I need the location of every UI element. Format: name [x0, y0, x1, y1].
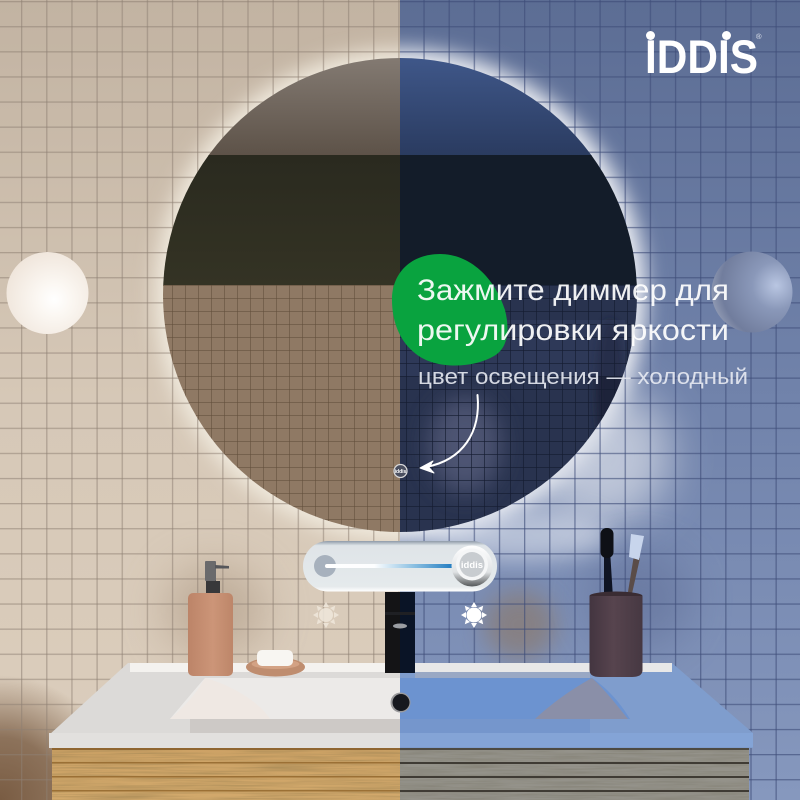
sun icon: low brightness	[313, 602, 339, 628]
warm mirror glow	[148, 40, 400, 541]
soap dish with soap	[246, 650, 305, 676]
slider knob: iddis	[461, 560, 483, 571]
mirror warm half	[163, 58, 400, 532]
faucet	[385, 592, 415, 673]
background: warm tiled wall	[0, 0, 400, 800]
left glowing lamp	[6, 252, 88, 334]
touch dimmer icon on mirror: iddis	[395, 469, 407, 475]
right cool lamp	[712, 252, 792, 332]
cold mirror glow	[400, 34, 660, 541]
subheading: light colour: цвет освещения — холодный	[418, 364, 748, 389]
touch dimmer icon on mirror	[394, 464, 407, 478]
slider track	[325, 564, 455, 568]
soap dispenser	[188, 561, 233, 676]
wood cabinet warm half	[52, 748, 400, 800]
green highlight blob	[392, 254, 507, 366]
sink countertop cold half	[400, 663, 753, 748]
toothbrush: light	[627, 534, 644, 598]
IDDIS logo: IDDIS	[645, 30, 758, 83]
IDDIS logo: ®	[756, 32, 762, 41]
arrow to dimmer button	[420, 395, 478, 473]
slider start dot	[314, 555, 336, 577]
background: cold tiled wall	[400, 0, 800, 800]
drain	[390, 692, 410, 712]
sun icon: high brightness	[461, 602, 487, 628]
slider knob	[452, 546, 492, 586]
sink countertop warm half	[49, 663, 400, 748]
headline line 2: регулировки яркости	[417, 314, 729, 347]
toothbrush: black	[600, 528, 614, 598]
dimmer slider panel	[303, 541, 497, 592]
wood cabinet cold half	[400, 748, 749, 800]
round mirror	[163, 58, 637, 532]
headline text	[417, 274, 729, 347]
mirror cold half	[400, 58, 637, 532]
headline line 1: Зажмите диммер для	[417, 274, 729, 307]
toothbrush cup	[590, 592, 642, 677]
